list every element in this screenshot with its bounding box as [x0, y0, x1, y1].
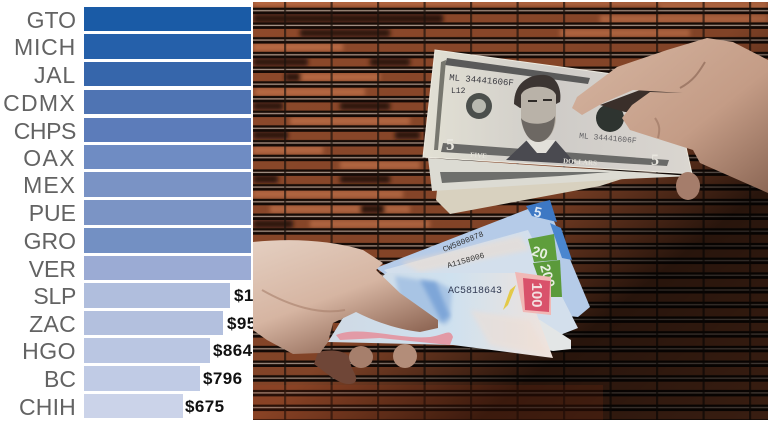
bill serial numbers and denominations: L12 — [451, 87, 466, 96]
bill serial numbers and denominations: DOLLARS — [563, 157, 597, 167]
main five dollar bill — [423, 50, 692, 174]
middle bills — [384, 230, 578, 335]
photo: hands exchanging dollars and pesos on a bamboo mat — [253, 2, 768, 420]
bar row: PUE: PUE — [29, 200, 76, 226]
bar row: BC: $796 — [203, 369, 242, 388]
bar row: JAL — [34, 62, 251, 88]
bill serial numbers and denominations: FIVE — [470, 151, 487, 160]
left hand holding pesos — [253, 240, 438, 384]
treasury seal — [466, 93, 492, 119]
right hand holding dollars — [572, 38, 768, 200]
bar row: CHIH: CHIH — [19, 394, 76, 420]
green denomination tags — [528, 234, 562, 297]
bill serial numbers and denominations: 5 — [651, 152, 659, 169]
bar row: HGO: $864 — [213, 341, 252, 360]
US dollar bills — [423, 50, 692, 214]
bar row: ZAC: $95 — [227, 314, 257, 333]
bar row: SLP — [33, 283, 254, 309]
Mexican peso bills: AC5818643 — [448, 286, 502, 297]
bar row: SLP: $1 — [234, 286, 254, 305]
bar row: VER: VER — [29, 256, 76, 282]
lower dollar stack — [436, 178, 625, 214]
bar row: GRO: GRO — [24, 228, 76, 254]
bar row: HGO — [22, 338, 252, 364]
Mexican peso bills: 100 — [528, 282, 545, 308]
dark coin gap between fingers — [596, 104, 624, 132]
finger under the bills — [676, 172, 700, 200]
front hundred peso bill — [328, 272, 553, 358]
bar row: GRO — [24, 228, 251, 254]
bar row: GTO — [27, 7, 251, 33]
bar row: MEX — [23, 172, 251, 198]
bill serial numbers and denominations: 5 — [446, 135, 454, 154]
palm and thumb — [253, 240, 438, 354]
Mexican peso bills: CW5800878 — [442, 230, 485, 255]
bar row: OAX — [23, 145, 251, 171]
bar row: GTO: GTO — [27, 7, 76, 33]
bar row: ZAC — [29, 311, 257, 337]
bar row: ZAC: ZAC — [29, 311, 76, 337]
bar row: CHPS: CHPS — [14, 118, 76, 144]
bar row: HGO: HGO — [22, 338, 76, 364]
Mexican peso bills: 5 — [532, 203, 544, 221]
bar row: CDMX: CDMX — [3, 90, 76, 116]
Mexican peso bills: A1158006 — [446, 252, 486, 271]
bar row: CHIH — [19, 394, 224, 420]
bar row: JAL: JAL — [34, 62, 76, 88]
bar row: PUE — [29, 200, 251, 226]
portrait of Lincoln — [506, 75, 576, 164]
bar row: CHPS — [14, 118, 251, 144]
back blue bill — [376, 202, 590, 317]
green denomination tags: 20 — [530, 243, 550, 262]
bar row: SLP: SLP — [33, 283, 76, 309]
lower fingers — [314, 350, 356, 384]
bar row: MICH — [14, 34, 251, 60]
hand — [572, 38, 768, 193]
bar row: OAX: OAX — [23, 145, 76, 171]
green denomination tags: 200 — [537, 262, 559, 289]
bar row: BC: BC — [44, 366, 76, 392]
bar row: MEX: MEX — [23, 172, 76, 198]
bar row: MICH: MICH — [14, 34, 76, 60]
bar chart: states ranking — [3, 7, 257, 420]
bar row: CHIH: $675 — [185, 397, 224, 416]
bamboo mat background — [253, 0, 768, 420]
bar row: CDMX — [3, 90, 251, 116]
bill serial numbers and denominations: ML 34441606F — [579, 132, 637, 146]
Mexican peso bills — [328, 200, 590, 358]
bar row: VER — [28, 256, 251, 282]
bill serial numbers and denominations — [446, 73, 659, 169]
bar row: BC — [44, 366, 242, 392]
bill serial numbers and denominations: ML 34441606F — [449, 73, 514, 89]
